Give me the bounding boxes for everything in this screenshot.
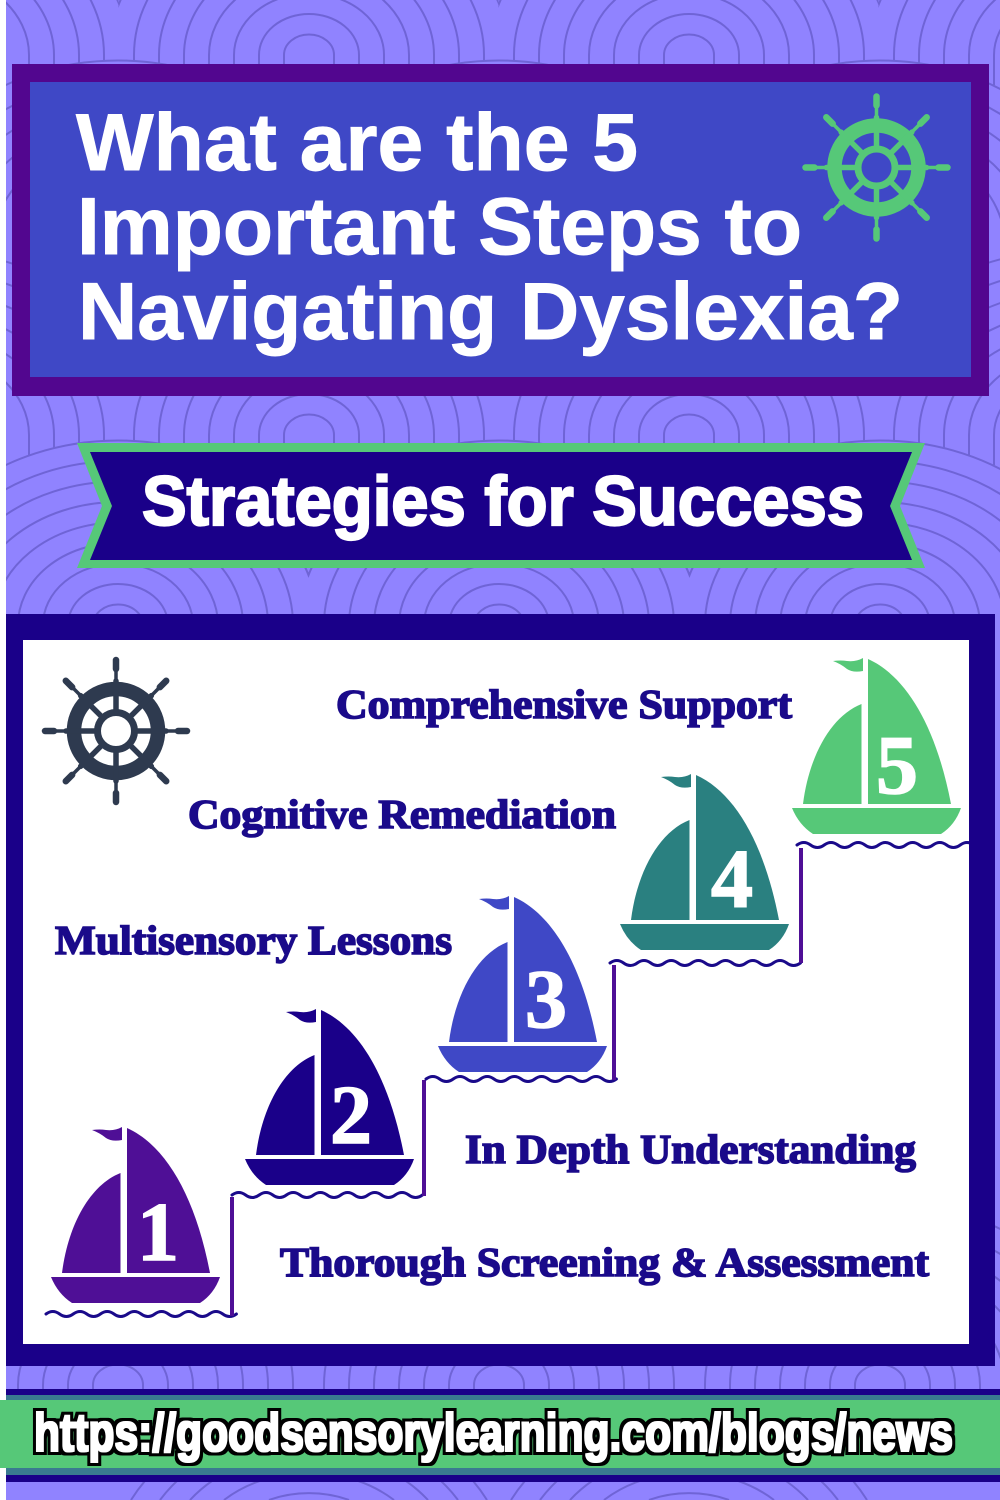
step label 5: Comprehensive Support (336, 681, 792, 727)
step label 1: Thorough Screening & Assessment (280, 1239, 929, 1285)
banner text: Strategies for Success (142, 462, 864, 540)
boat 4: 4 (711, 833, 753, 926)
stair step 2 (232, 1080, 426, 1198)
boat 5 (792, 658, 961, 834)
title (76, 98, 903, 357)
boat 4 (620, 774, 789, 950)
stair step 5 wave (795, 841, 969, 849)
stair step 1 (46, 1197, 236, 1316)
boat 3 (438, 896, 607, 1072)
footer band (0, 1389, 1000, 1482)
icon: green ship wheel (806, 96, 948, 238)
stair step 3 (426, 965, 616, 1082)
boat 1: 1 (137, 1186, 179, 1279)
title: Navigating Dyslexia? (78, 267, 903, 357)
stair step 4 (610, 848, 803, 966)
boat 5: 5 (876, 719, 918, 812)
boat 1 (51, 1127, 220, 1303)
panel: steps (6, 614, 995, 1366)
title: Important Steps to (77, 182, 802, 272)
title: What are the 5 (76, 98, 638, 188)
panel: title header (12, 64, 989, 396)
boat 3: 3 (525, 953, 567, 1046)
icon: dark ship wheel (45, 660, 187, 802)
step label 4: Cognitive Remediation (188, 791, 616, 837)
boat 2: 2 (330, 1069, 372, 1162)
boat 2 (245, 1009, 414, 1185)
banner: strategies for success (77, 443, 925, 568)
step label 3: Multisensory Lessons (55, 917, 452, 963)
step label 2: In Depth Understanding (465, 1126, 917, 1172)
